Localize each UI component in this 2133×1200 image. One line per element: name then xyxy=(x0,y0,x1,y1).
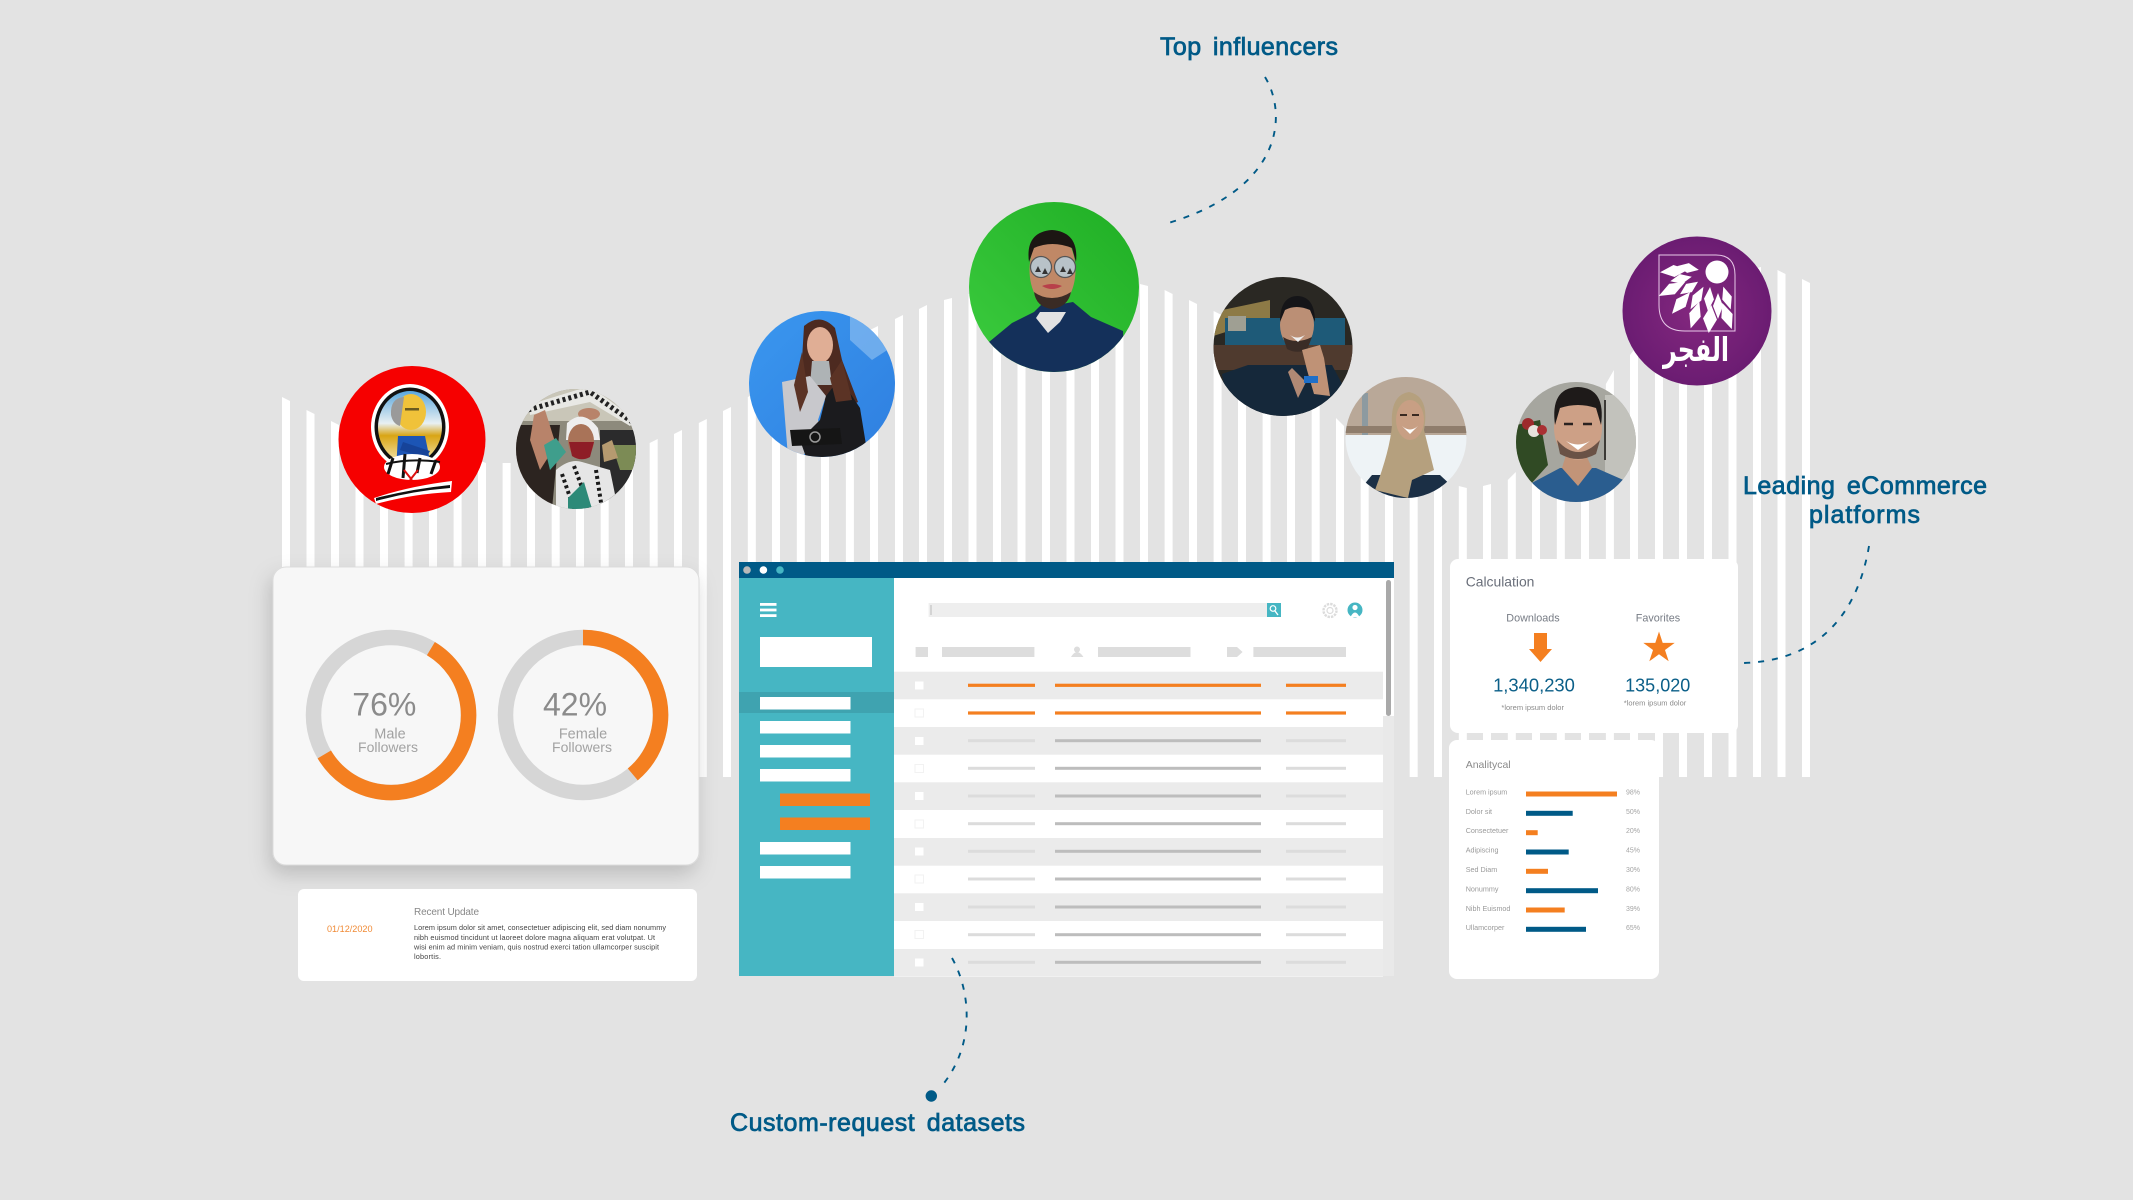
icon: avatar protest woman xyxy=(516,386,640,509)
icon: avatar red cartoon logo xyxy=(338,366,486,513)
arrow: dashed curve from Leading eCommerce platforms xyxy=(1744,546,1869,663)
bar row: Nonummy xyxy=(1466,884,1640,894)
arrow: dashed curve to Custom-request datasets xyxy=(926,958,967,1102)
recent update body text xyxy=(413,923,666,961)
icon: avatar man in cafe xyxy=(1213,277,1353,420)
bar row: Consectetuer xyxy=(1466,826,1640,835)
bar row: Dolor sit xyxy=(1466,807,1640,816)
icon: purple Al-Fajr logo: الفجر xyxy=(1661,330,1729,369)
chart: male followers donut: 76% xyxy=(352,686,416,722)
bar row: Consectetuer: Consectetuer xyxy=(1466,826,1509,835)
arrow: dashed curve from Top influencers xyxy=(1165,77,1276,224)
icon: avatar smiling man in denim shirt xyxy=(1516,382,1637,510)
favorites stat: *lorem ipsum dolor xyxy=(1624,699,1687,708)
white vertical bar wave xyxy=(282,267,1810,777)
calculation title: Calculation xyxy=(1466,574,1534,590)
favorites stat: 135,020 xyxy=(1625,676,1690,696)
heading: Leading eCommerce platforms: platforms xyxy=(1809,501,1920,529)
bar row: Ullamcorper xyxy=(1466,923,1640,932)
recent update body text: lobortis. xyxy=(414,952,441,961)
bar row: Nibh Euismod: 39% xyxy=(1626,906,1640,913)
favorites stat: Favorites xyxy=(1636,613,1681,625)
icon: avatar man with round sunglasses xyxy=(969,202,1139,380)
bar row: Sed Diam: Sed Diam xyxy=(1466,865,1497,874)
table header xyxy=(916,646,1346,657)
heading: Custom-request datasets: Custom-request datasets xyxy=(730,1109,1025,1137)
heading: Leading eCommerce platforms xyxy=(1743,472,1987,529)
title bar xyxy=(739,562,1394,578)
panel: recent update xyxy=(298,889,697,981)
downloads stat: 1,340,230 xyxy=(1493,675,1575,696)
bar row: Lorem ipsum: 98% xyxy=(1626,790,1640,796)
recent update body text: wisi enim ad minim veniam, quis nostrud exerci tation ullamcorper suscipit xyxy=(413,942,659,952)
heading: Top influencers: Top influencers xyxy=(1160,33,1338,61)
chart: male followers donut xyxy=(314,638,469,793)
icon: star xyxy=(1643,632,1675,661)
bar row: Consectetuer: 20% xyxy=(1626,828,1640,835)
favorites stat xyxy=(1624,613,1690,708)
bar row: Adipiscing xyxy=(1466,846,1640,854)
panel: analitycal bar list xyxy=(1449,740,1659,979)
icon: user avatar xyxy=(1348,602,1362,618)
panel: calculation xyxy=(1450,559,1738,733)
bar row: Dolor sit: Dolor sit xyxy=(1466,807,1492,816)
bar row: Sed Diam xyxy=(1466,865,1640,874)
chart: female followers donut: Female xyxy=(559,726,607,742)
heading: Leading eCommerce platforms: Leading eCommerce xyxy=(1743,472,1987,500)
bar row: Adipiscing: 45% xyxy=(1626,848,1640,854)
bar row: Ullamcorper: Ullamcorper xyxy=(1466,923,1505,932)
downloads stat: Downloads xyxy=(1506,613,1560,625)
bar row: Nibh Euismod xyxy=(1466,904,1640,913)
icon: settings gear xyxy=(1324,604,1336,617)
icon: avatar woman in hijab xyxy=(1345,377,1467,510)
bar row: Adipiscing: Adipiscing xyxy=(1466,846,1498,854)
recent update title: Recent Update xyxy=(414,907,479,918)
sidebar xyxy=(739,578,894,976)
downloads stat xyxy=(1493,613,1575,712)
chart: male followers donut: Followers xyxy=(358,739,418,755)
recent update body text: Lorem ipsum dolor sit amet, consectetuer adipiscing elit, sed diam nonummy xyxy=(414,923,666,932)
bar row: Lorem ipsum: Lorem ipsum xyxy=(1466,788,1507,796)
icon: download arrow xyxy=(1529,633,1552,662)
panel: dashboard window xyxy=(739,562,1394,977)
chart: female followers donut: 42% xyxy=(543,686,607,722)
downloads stat: *lorem ipsum dolor xyxy=(1501,703,1564,712)
bar row: Ullamcorper: 65% xyxy=(1626,925,1640,932)
icon: avatar woman on blue wall xyxy=(749,311,895,457)
table rows xyxy=(894,672,1383,977)
bar row: Nibh Euismod: Nibh Euismod xyxy=(1466,904,1510,913)
bar row: Sed Diam: 30% xyxy=(1626,867,1640,874)
scrollbar xyxy=(1386,580,1391,716)
chart: female followers donut: Followers xyxy=(552,739,612,755)
chart: female followers donut xyxy=(506,638,661,792)
chart: male followers donut: Male xyxy=(374,726,406,742)
search bar xyxy=(929,603,1281,617)
panel: followers xyxy=(273,567,699,865)
bar row: Lorem ipsum xyxy=(1466,788,1640,796)
date: 01/12/2020 xyxy=(327,924,373,934)
bar row: Dolor sit: 50% xyxy=(1626,809,1640,816)
recent update body text: nibh euismod tincidunt ut laoreet dolore magna aliquam erat volutpat. Ut xyxy=(414,933,655,942)
bar row: Nonummy: Nonummy xyxy=(1466,884,1499,894)
bar row: Nonummy: 80% xyxy=(1626,886,1640,894)
analitycal title: Analitycal xyxy=(1466,759,1511,771)
icon: purple Al-Fajr logo xyxy=(1622,236,1772,386)
